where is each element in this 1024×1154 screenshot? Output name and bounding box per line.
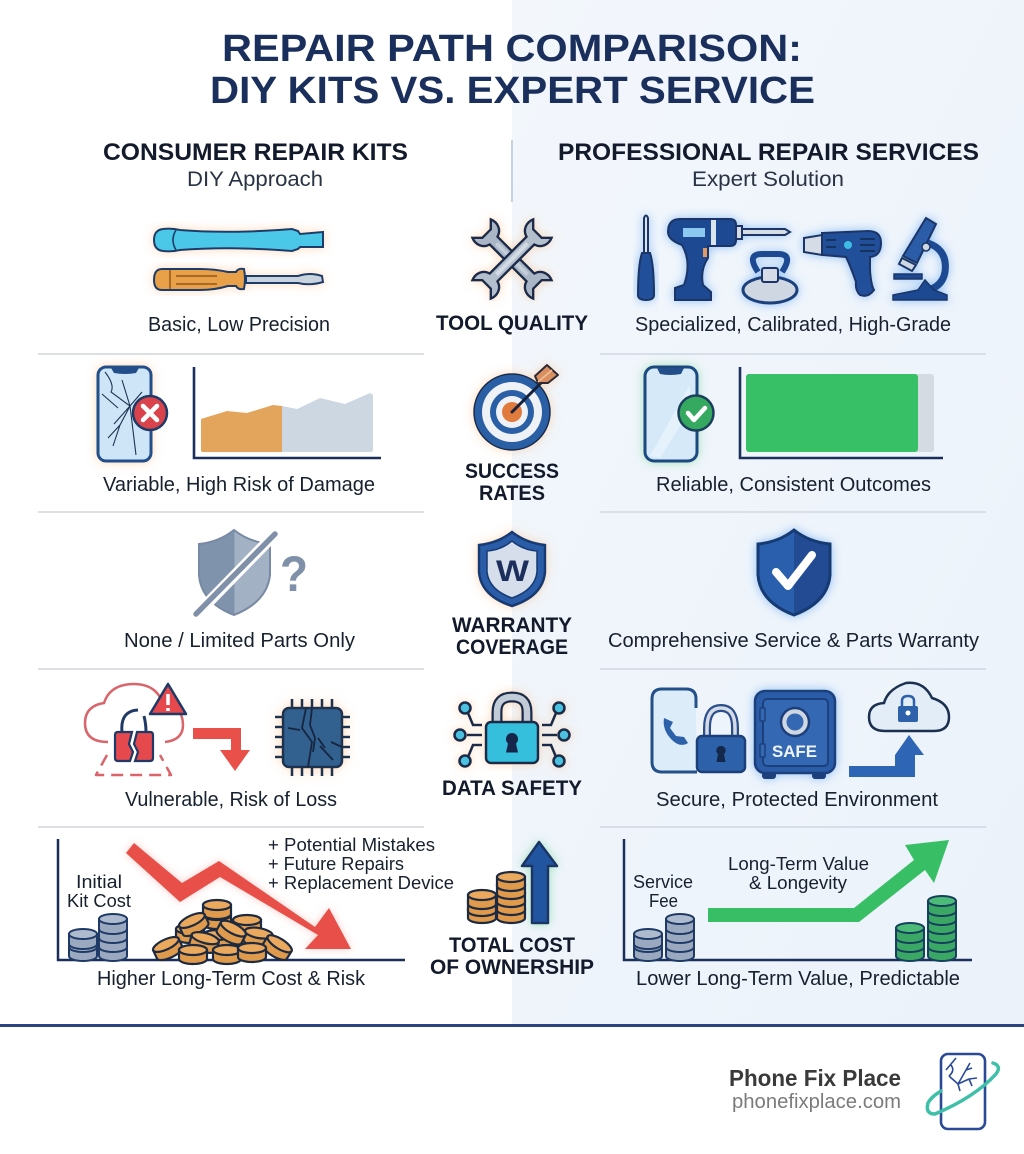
panel: professional data safety (652, 683, 949, 811)
center: total cost of ownership (430, 842, 594, 979)
label: initial kit cost: Kit Cost (67, 891, 131, 911)
icon: power drill (668, 219, 790, 300)
footer logo (729, 1054, 998, 1129)
icon: heat gun (804, 231, 881, 296)
label: service fee (633, 872, 693, 911)
icon: microscope (893, 218, 947, 300)
chart axes (624, 839, 972, 960)
icon: crossed wrenches (472, 219, 552, 299)
arrow: value growth (708, 840, 949, 922)
label: Vulnerable, Risk of Loss (125, 789, 337, 811)
label: initial kit cost: Initial (76, 872, 122, 892)
label: Variable, High Risk of Damage (103, 474, 375, 496)
label: long-term value: & Longevity (749, 873, 847, 893)
label: service fee: Service (633, 872, 693, 892)
center: data safety (442, 697, 582, 800)
label: Secure, Protected Environment (656, 789, 938, 811)
heading (430, 934, 594, 979)
right column heading (558, 139, 979, 191)
icon: cracked phone (98, 367, 151, 461)
heading (465, 460, 559, 505)
heading: TOTAL COST (449, 934, 575, 957)
chart: reliable outcomes bar (740, 367, 943, 458)
icon: W shield: W (496, 555, 530, 588)
panel: DIY total cost (58, 835, 454, 990)
center: success rates (465, 365, 559, 505)
icon: error badge (133, 396, 167, 430)
icon: orange screwdriver (154, 269, 323, 290)
icon: precision screwdriver (638, 216, 654, 300)
label: Basic, Low Precision (148, 314, 330, 336)
right column heading: Expert Solution (692, 168, 844, 191)
label: service fee: Fee (649, 891, 678, 911)
left column heading: DIY Approach (187, 168, 323, 191)
arrow: down to chip (193, 728, 250, 771)
arrow: rising cost zigzag (126, 843, 351, 949)
heading: WARRANTY (452, 614, 572, 637)
panel: DIY tool quality (148, 229, 330, 336)
label: long-term value: Long-Term Value (728, 854, 869, 874)
heading: COVERAGE (456, 636, 568, 659)
icon: broken cloud lock (85, 684, 186, 775)
label: Higher Long-Term Cost & Risk (97, 968, 366, 990)
label: Reliable, Consistent Outcomes (656, 474, 931, 496)
icon: intact phone (645, 367, 697, 461)
heading: SUCCESS (465, 460, 559, 483)
chart axes (58, 839, 405, 960)
icon: safe (755, 691, 835, 779)
panel: professional tool quality (635, 216, 951, 336)
icon: suction cup (743, 254, 797, 303)
label: Specialized, Calibrated, High-Grade (635, 314, 951, 336)
brand name (729, 1065, 901, 1113)
title: REPAIR PATH COMPARISON: (222, 28, 802, 70)
label: None / Limited Parts Only (124, 630, 355, 652)
heading: OF OWNERSHIP (430, 956, 594, 979)
right column heading: PROFESSIONAL REPAIR SERVICES (558, 139, 979, 166)
label: Lower Long-Term Value, Predictable (636, 968, 960, 990)
label: initial kit cost (67, 872, 131, 911)
icon: crossed-out shield with question mark: ? (280, 546, 308, 602)
right column background (512, 0, 1024, 1024)
list: hidden costs: + Future Repairs (268, 854, 404, 874)
panel: DIY data safety (85, 684, 350, 811)
panel: DIY warranty (124, 530, 355, 652)
list: hidden costs: + Potential Mistakes (268, 835, 435, 855)
panel: DIY success rates (98, 367, 381, 496)
icon: green coins (896, 896, 956, 961)
center: warranty coverage (452, 532, 572, 659)
heading: RATES (479, 482, 545, 505)
arrow: up to cloud (849, 735, 924, 777)
label: Comprehensive Service & Parts Warranty (608, 630, 979, 652)
icon: checked shield (758, 530, 830, 615)
brand name: Phone Fix Place (729, 1065, 901, 1091)
icon: padlock with circuit (454, 697, 570, 766)
icon: check badge (678, 396, 714, 430)
icon: phone with lock (652, 689, 745, 772)
label: long-term value (728, 854, 869, 893)
icon: coins and up arrow (468, 842, 557, 923)
list: hidden costs (268, 835, 454, 893)
icon: coin pile (151, 900, 294, 964)
center: tool quality (436, 219, 588, 335)
panel: professional success rates (645, 367, 943, 496)
chart: variable outcomes area (194, 367, 381, 458)
icon: cloud lock (869, 683, 949, 731)
heading (452, 614, 572, 659)
icon: service fee coins (634, 914, 694, 961)
icon: safe: SAFE (772, 742, 817, 761)
icon: crossed-out shield with question mark (196, 530, 308, 615)
icon: pry tool (154, 229, 323, 251)
icon: cracked chip (275, 699, 350, 776)
icon: kit cost coins (69, 914, 127, 961)
icon: target with arrow (474, 365, 558, 450)
left column heading (103, 139, 408, 191)
panel: professional total cost (624, 839, 972, 990)
panel: professional warranty (608, 530, 979, 652)
icon: cracked phone with ring (927, 1054, 998, 1129)
heading: TOOL QUALITY (436, 312, 588, 335)
heading: DATA SAFETY (442, 777, 582, 800)
title (210, 28, 815, 112)
list: hidden costs: + Replacement Device (268, 873, 454, 893)
title: DIY KITS VS. EXPERT SERVICE (210, 70, 815, 112)
brand name: phonefixplace.com (732, 1091, 901, 1113)
left column heading: CONSUMER REPAIR KITS (103, 139, 408, 166)
